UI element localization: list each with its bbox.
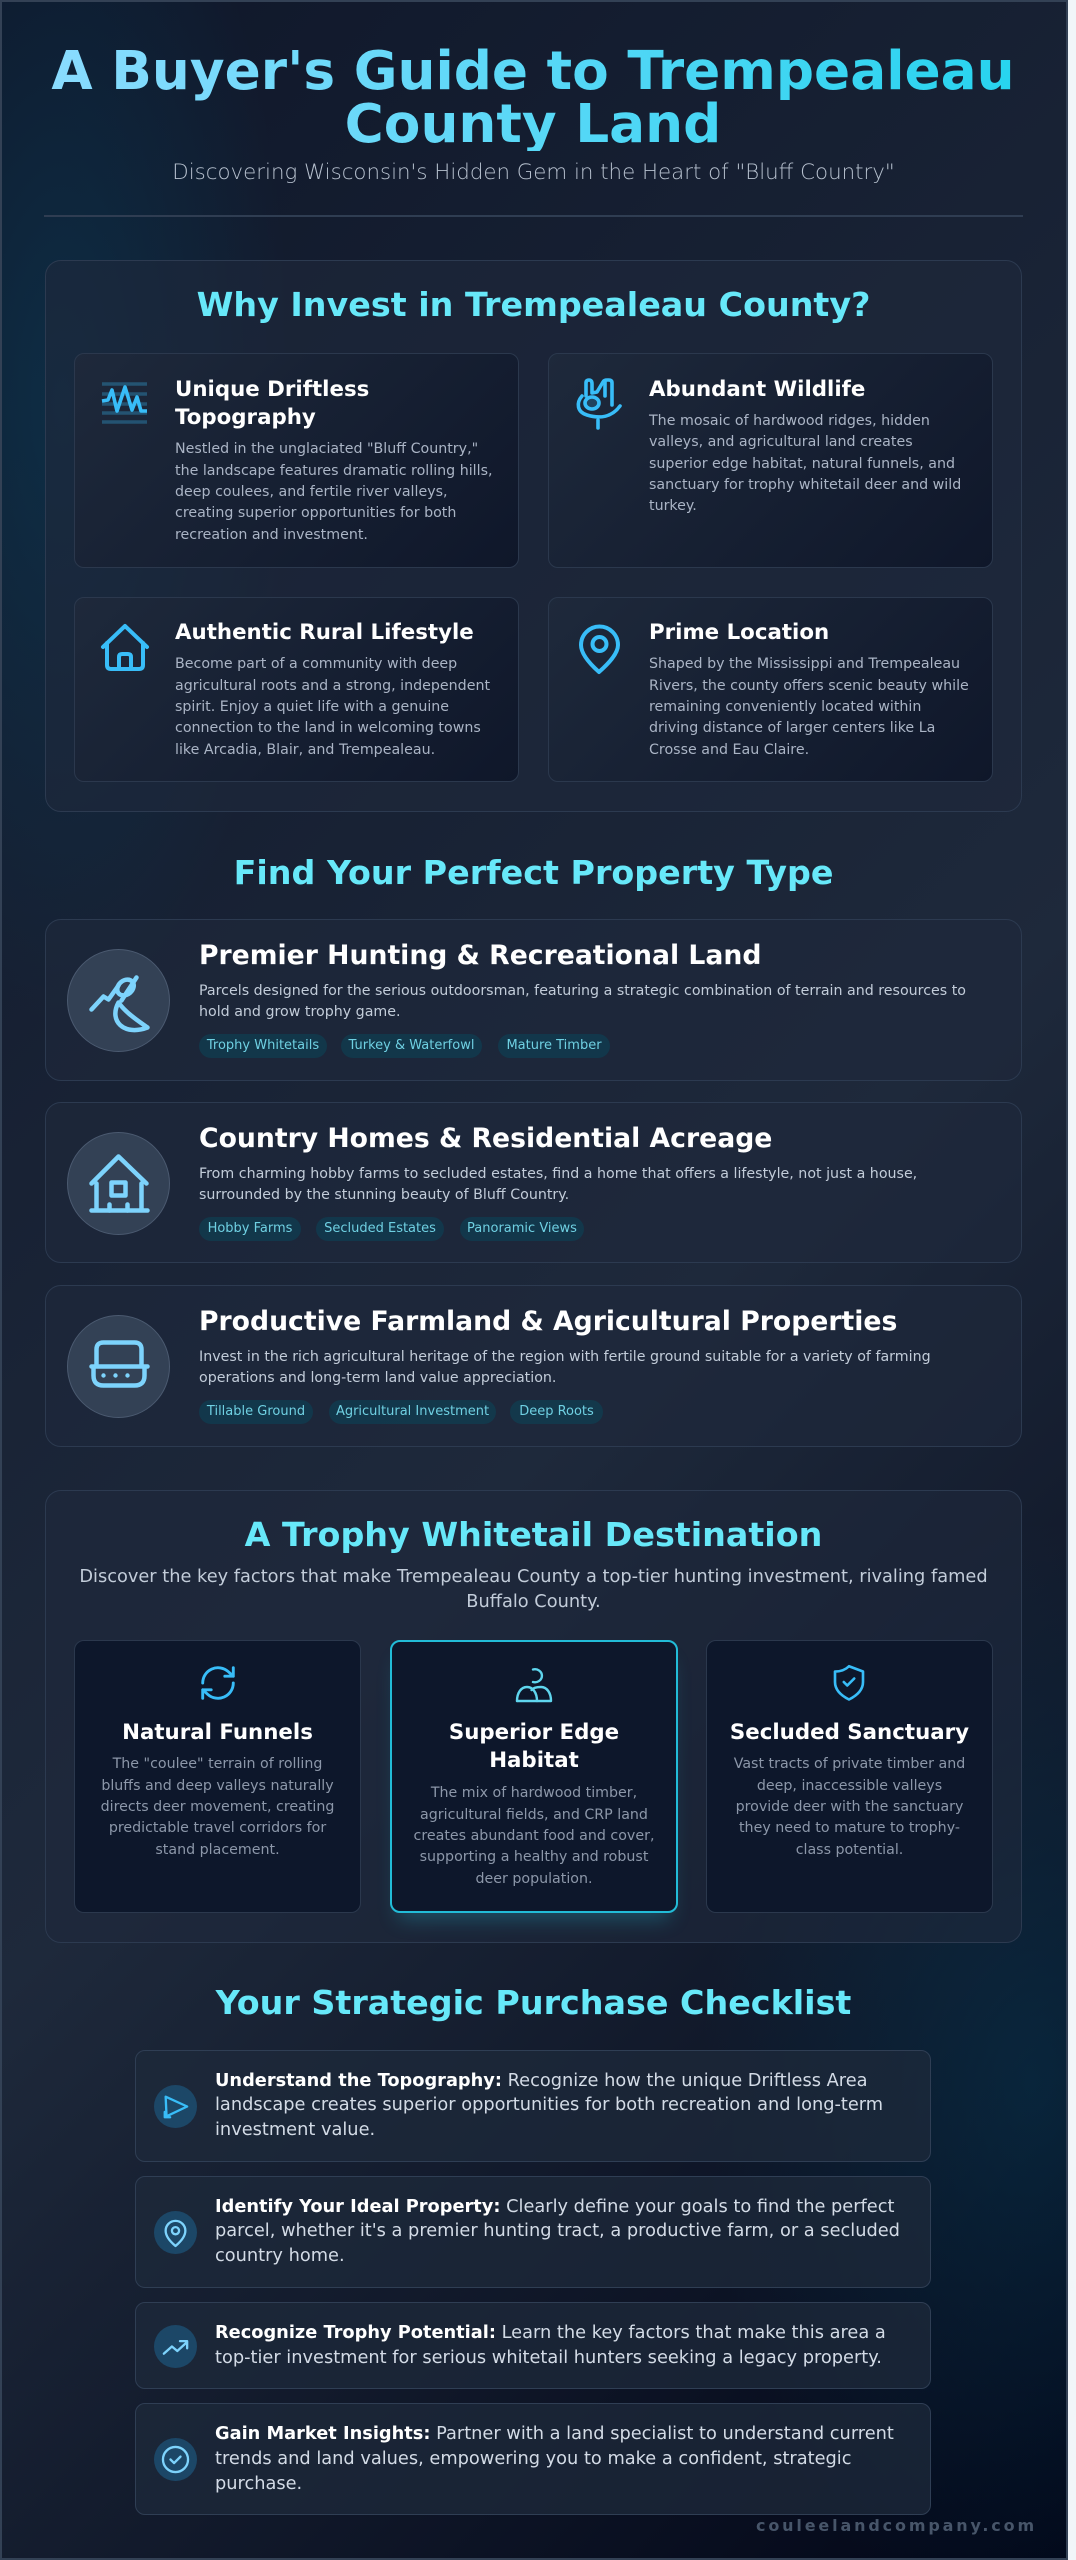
tag: Agricultural Investment (336, 1404, 489, 1418)
footer url: couleelandcompany.com (756, 2516, 1037, 2534)
text: connection to the land in welcoming towns (175, 720, 481, 736)
text (199, 1166, 917, 1203)
heading: Country Homes & Residential Acreage (199, 1123, 772, 1154)
text: trends and land values, empowering you to make a confident, strategic (215, 2448, 852, 2469)
card: superior edge habitat (390, 1640, 678, 1913)
text: trophy intro: Buffalo County. (466, 1590, 601, 1612)
heading: Superior Edge (449, 1720, 619, 1745)
heading: why invest: Why Invest in Trempealeau County? (197, 284, 870, 324)
text: trophy intro (79, 1566, 988, 1612)
icon: refresh (201, 1666, 235, 1700)
text (414, 1785, 654, 1887)
text: the landscape features dramatic rolling hills, (175, 463, 492, 479)
card: abundant wildlife (548, 353, 993, 568)
text: Nestled in the unglaciated "Bluff Country," (175, 441, 478, 457)
icon: play (154, 2084, 196, 2128)
icon: shield (834, 1664, 864, 1701)
text (648, 413, 961, 514)
text (101, 1756, 334, 1858)
text: deer population. (475, 1871, 593, 1887)
text: top-tier investment for serious whitetail hunters seeking a legacy property. (215, 2347, 882, 2368)
card: prime location (548, 597, 993, 782)
text: parcel, whether it's a premier hunting tract, a productive farm, or a secluded (215, 2220, 900, 2241)
heading: checklist: Your Strategic Purchase Checklist (216, 1982, 851, 2022)
text: Shaped by the Mississippi and Trempealeau (649, 656, 960, 672)
text: hold and grow trophy game. (199, 1004, 401, 1020)
checklist item: topography (135, 2050, 931, 2162)
text: surrounded by the stunning beauty of Bluff Country. (199, 1187, 569, 1203)
tag: Trophy Whitetails (207, 1038, 319, 1052)
tag: Tillable Ground (207, 1404, 305, 1418)
title: A Buyer's Guide to Trempealeau (51, 39, 1015, 102)
text: deep, inaccessible valleys (757, 1778, 942, 1794)
text (649, 656, 969, 758)
heading (449, 1720, 619, 1773)
text: remaining conveniently located within (649, 699, 921, 715)
text: turkey. (649, 498, 697, 514)
text: spirit. Enjoy a quiet life with a genuine (175, 699, 449, 715)
text: bluffs and deep valleys naturally (101, 1778, 334, 1794)
heading: Secluded Sanctuary (730, 1720, 969, 1745)
property card: farmland (45, 1285, 1022, 1447)
title (0, 44, 1066, 151)
text: Identify Your Ideal Property: Clearly define your goals to find the perfect (215, 2196, 894, 2216)
card: authentic rural lifestyle (74, 597, 519, 782)
tag: Panoramic Views (467, 1220, 577, 1236)
text: like Arcadia, Blair, and Trempealeau. (175, 742, 435, 758)
tag: Turkey & Waterfowl (349, 1038, 474, 1052)
text: directs deer movement, creating (101, 1799, 334, 1815)
icon: person (516, 1668, 552, 1702)
heading: Prime Location (649, 620, 829, 645)
text: agricultural roots and a strong, independent (175, 678, 490, 694)
text: recreation and investment. (175, 527, 368, 543)
tag (460, 1216, 584, 1240)
tag: Secluded Estates (324, 1220, 436, 1236)
tag (199, 1034, 327, 1058)
text (199, 982, 966, 1020)
tags (199, 1400, 603, 1424)
text: Understand the Topography: Recognize how the unique Driftless Area (215, 2070, 868, 2090)
text: landscape creates superior opportunities for both recreation and long-term (215, 2094, 883, 2115)
text: agricultural fields, and CRP land (420, 1807, 648, 1823)
text (734, 1756, 965, 1858)
text: Recognize Trophy Potential: Learn the key factors that make this area a (215, 2322, 886, 2343)
tag (498, 1034, 610, 1058)
card: unique driftless topography (74, 353, 519, 568)
text: sanctuary for trophy whitetail deer and wild (649, 477, 961, 493)
tag (329, 1400, 496, 1424)
tag (316, 1216, 444, 1240)
heading: Topography (175, 405, 316, 430)
checklist item: market (135, 2403, 931, 2515)
icon: check circle (154, 2438, 196, 2480)
text: operations and long-term land value appreciation. (199, 1370, 556, 1386)
panel: why invest (45, 260, 1022, 812)
text: The mosaic of hardwood ridges, hidden (649, 413, 930, 429)
card: natural funnels (74, 1640, 361, 1913)
heading: Abundant Wildlife (649, 377, 865, 402)
heading: Authentic Rural Lifestyle (175, 620, 474, 645)
heading: Unique Driftless (175, 377, 369, 402)
text: country home. (215, 2245, 345, 2266)
text: creating superior opportunities for both (175, 505, 456, 521)
tags (199, 1034, 610, 1058)
tag: Hobby Farms (208, 1220, 292, 1236)
icon: map pin (579, 624, 620, 674)
text: provide deer with the sanctuary (736, 1799, 963, 1815)
heading (175, 377, 369, 430)
icon: trend (154, 2324, 196, 2368)
checklist item: trophy (135, 2302, 931, 2389)
text: valleys, and agricultural land creates (649, 434, 913, 450)
text: superior edge habitat, natural funnels, and (649, 456, 955, 472)
text (199, 1348, 931, 1386)
heading: Productive Farmland & Agricultural Properties (199, 1306, 897, 1337)
text (175, 656, 490, 758)
text: investment value. (215, 2119, 375, 2140)
text: Rivers, the county offers scenic beauty while (649, 678, 969, 694)
tag (199, 1400, 313, 1424)
heading: trophy: A Trophy Whitetail Destination (245, 1515, 822, 1554)
tag (510, 1400, 603, 1424)
tag (199, 1216, 301, 1240)
title: County Land (345, 92, 721, 155)
heading: Habitat (489, 1748, 579, 1773)
property card: hunting (45, 919, 1022, 1081)
text (175, 441, 492, 543)
heading: Premier Hunting & Recreational Land (199, 940, 761, 971)
text: The mix of hardwood timber, (431, 1785, 637, 1801)
checklist item: property (135, 2176, 931, 2288)
icon: wildlife (576, 378, 622, 430)
tag: Deep Roots (519, 1404, 594, 1418)
text: The "coulee" terrain of rolling (113, 1756, 322, 1772)
text: trophy intro: Discover the key factors that make Trempealeau County a top-tier hunting investment, rivaling famed (79, 1566, 988, 1586)
icon: house (100, 624, 150, 671)
tags (199, 1217, 584, 1241)
panel: trophy whitetail (45, 1490, 1022, 1943)
text (215, 2070, 883, 2140)
icon: hunting (66, 949, 170, 1052)
icon: topography (102, 382, 147, 424)
text: they need to mature to trophy- (739, 1820, 960, 1836)
text: Crosse and Eau Claire. (649, 742, 809, 758)
text: Become part of a community with deep (175, 656, 457, 672)
text (215, 2423, 894, 2494)
text: Vast tracts of private timber and (734, 1756, 965, 1772)
text: Invest in the rich agricultural heritage of the region with fertile ground suitable for a variety of farming (199, 1348, 931, 1364)
tag (341, 1034, 482, 1058)
text: predictable travel corridors for (109, 1820, 326, 1836)
card: secluded sanctuary (706, 1640, 993, 1913)
text: deep coulees, and fertile river valleys, (175, 484, 448, 500)
text (215, 2196, 900, 2266)
text: supporting a healthy and robust (420, 1849, 648, 1865)
text (215, 2322, 886, 2368)
icon: pin (154, 2210, 196, 2254)
text: stand placement. (155, 1842, 280, 1858)
text: driving distance of larger centers like La (649, 720, 935, 736)
heading: Natural Funnels (122, 1720, 313, 1745)
text: Gain Market Insights: Partner with a land specialist to understand current (215, 2423, 894, 2444)
text: purchase. (215, 2473, 302, 2494)
heading: property type: Find Your Perfect Property Type (234, 852, 833, 892)
icon: farm (66, 1315, 170, 1418)
subtitle: Discovering Wisconsin's Hidden Gem in the Heart of "Bluff Country" (172, 160, 895, 184)
text: class potential. (796, 1842, 903, 1858)
tag: Mature Timber (506, 1038, 602, 1052)
property card: homes (45, 1102, 1022, 1263)
text: Parcels designed for the serious outdoorsman, featuring a strategic combination of terrain and resources to (199, 982, 966, 998)
text: From charming hobby farms to secluded estates, find a home that offers a lifestyle, not just a house, (199, 1166, 917, 1182)
icon: home (66, 1132, 170, 1235)
text: creates abundant food and cover, (414, 1828, 654, 1844)
